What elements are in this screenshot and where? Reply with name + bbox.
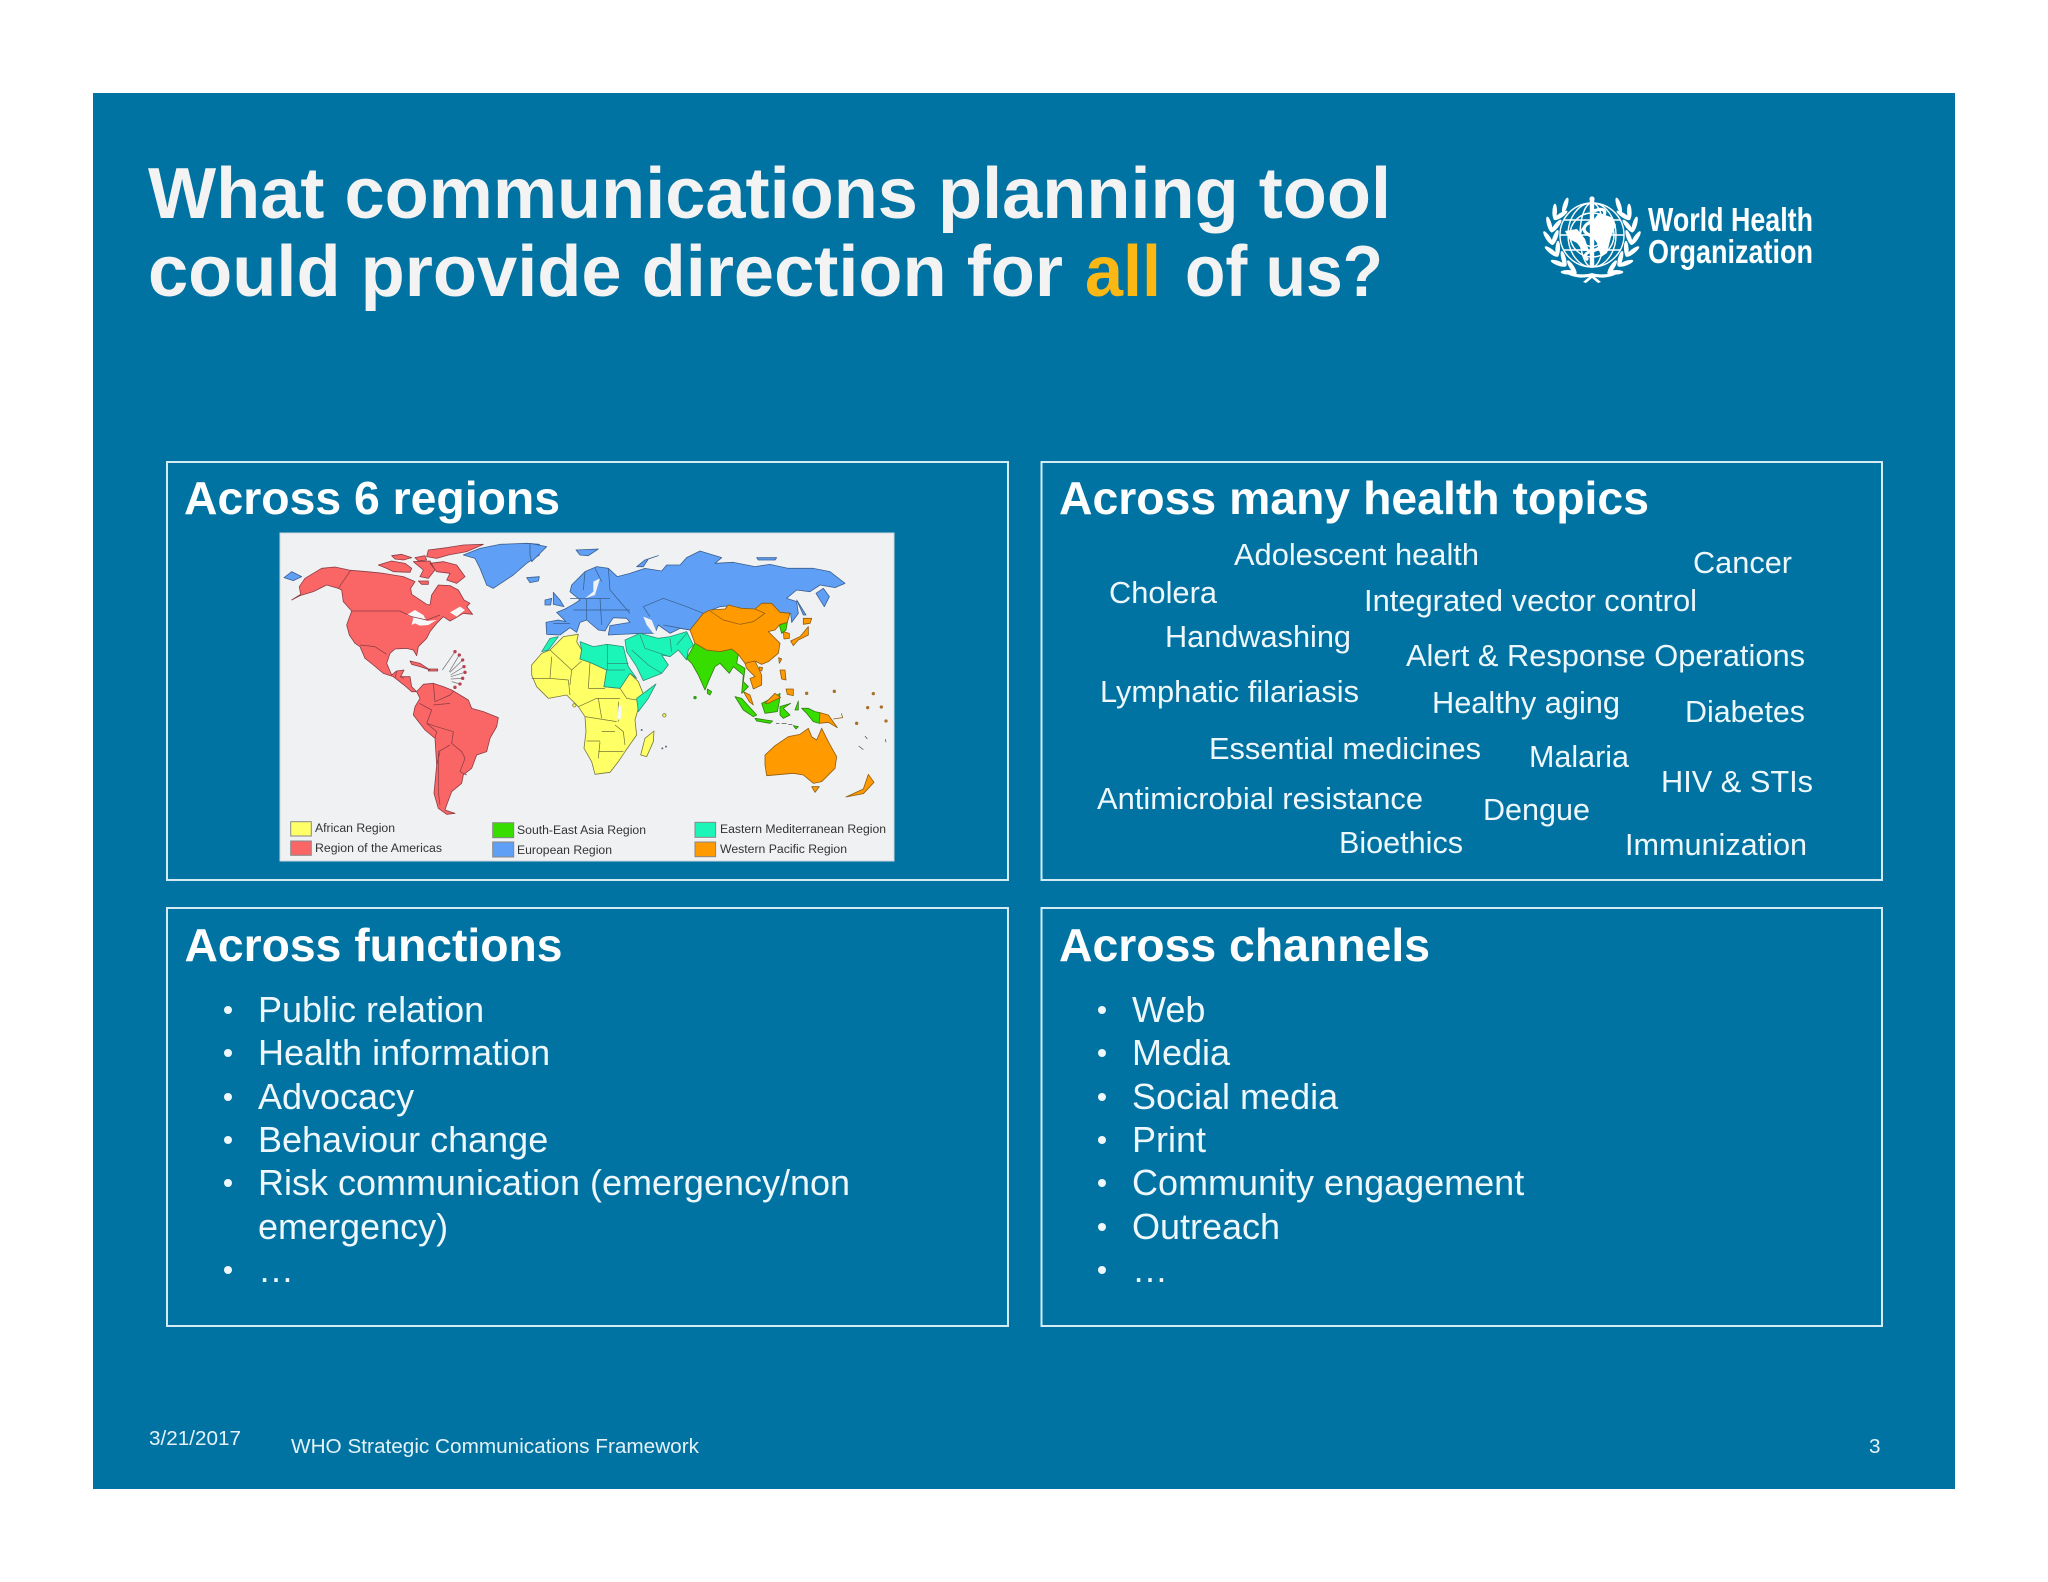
footer	[149, 1427, 1881, 1458]
title: of us?	[1185, 232, 1383, 312]
bullet list: Community engagement	[1132, 1162, 1524, 1203]
topic cloud: Healthy aging	[1432, 686, 1620, 720]
heading: Across many health topics	[1059, 472, 1649, 524]
panel: across channels	[1042, 908, 1882, 1326]
bullet list: Risk communication (emergency/non	[258, 1162, 850, 1203]
topic cloud: Malaria	[1529, 740, 1630, 774]
topic cloud: Dengue	[1483, 793, 1590, 827]
topic cloud: Essential medicines	[1209, 732, 1481, 766]
bullet list: Web	[1132, 989, 1205, 1030]
map legend labels: Eastern Mediterranean Region	[720, 824, 886, 836]
bullet list: …	[258, 1249, 294, 1290]
footer: WHO Strategic Communications Framework	[291, 1435, 700, 1458]
panel: across functions	[167, 908, 1008, 1326]
topic cloud	[1097, 538, 1813, 862]
map legend swatches	[291, 822, 716, 857]
map legend labels	[315, 823, 886, 857]
South-East Asia	[687, 622, 820, 729]
footer: 3/21/2017	[149, 1427, 241, 1450]
topic cloud: Alert & Response Operations	[1406, 639, 1805, 673]
Americas	[284, 543, 539, 814]
icon: WHO emblem	[1542, 196, 1642, 283]
footer: 3	[1869, 1435, 1881, 1458]
Europe and Russia	[530, 543, 845, 635]
bullet list: Outreach	[1132, 1206, 1280, 1247]
title: could provide direction for	[148, 232, 1063, 312]
world map of WHO regions	[280, 533, 894, 861]
bullet list: Social media	[1132, 1076, 1339, 1117]
title: What communications planning tool	[148, 154, 1391, 234]
heading: Across channels	[1059, 919, 1430, 971]
topic cloud: Cancer	[1693, 546, 1792, 580]
topic cloud: HIV & STIs	[1661, 765, 1813, 799]
topic cloud: Diabetes	[1685, 695, 1805, 729]
Eastern Mediterranean	[542, 632, 702, 712]
bullet list: Advocacy	[258, 1076, 414, 1117]
heading: Across 6 regions	[184, 472, 560, 524]
topic cloud: Bioethics	[1339, 826, 1463, 860]
map legend labels: European Region	[517, 845, 612, 857]
map legend labels: African Region	[315, 823, 395, 835]
bullet list: Print	[1132, 1119, 1206, 1160]
map legend labels: South-East Asia Region	[517, 825, 646, 837]
topic cloud: Lymphatic filariasis	[1100, 675, 1359, 709]
bullet list: Behaviour change	[258, 1119, 548, 1160]
wordmark: World Health	[1648, 201, 1813, 238]
title	[148, 154, 1391, 312]
map legend labels: Region of the Americas	[315, 843, 442, 855]
wordmark	[1648, 201, 1813, 270]
bullet list: emergency)	[258, 1206, 448, 1247]
topic cloud: Antimicrobial resistance	[1097, 782, 1423, 816]
wordmark: Organization	[1648, 233, 1813, 270]
panel: across 6 regions	[167, 462, 1008, 880]
bullet list: Media	[1132, 1032, 1231, 1073]
topic cloud: Cholera	[1109, 576, 1218, 610]
panel: across many health topics	[1042, 462, 1882, 880]
topic cloud: Integrated vector control	[1364, 584, 1697, 618]
topic cloud: Adolescent health	[1234, 538, 1479, 572]
bullet list: …	[1132, 1249, 1168, 1290]
topic cloud: Handwashing	[1165, 620, 1351, 654]
WHO logo	[1542, 196, 1813, 283]
bullet list	[224, 989, 850, 1290]
Africa	[532, 634, 667, 774]
bullet list: Public relation	[258, 989, 484, 1030]
title: all	[1085, 232, 1161, 312]
topic cloud: Immunization	[1625, 828, 1807, 862]
heading: Across functions	[184, 919, 562, 971]
bullet list: Health information	[258, 1032, 550, 1073]
Western Pacific	[690, 558, 888, 797]
bullet list	[1098, 989, 1524, 1290]
map legend labels: Western Pacific Region	[720, 844, 847, 856]
